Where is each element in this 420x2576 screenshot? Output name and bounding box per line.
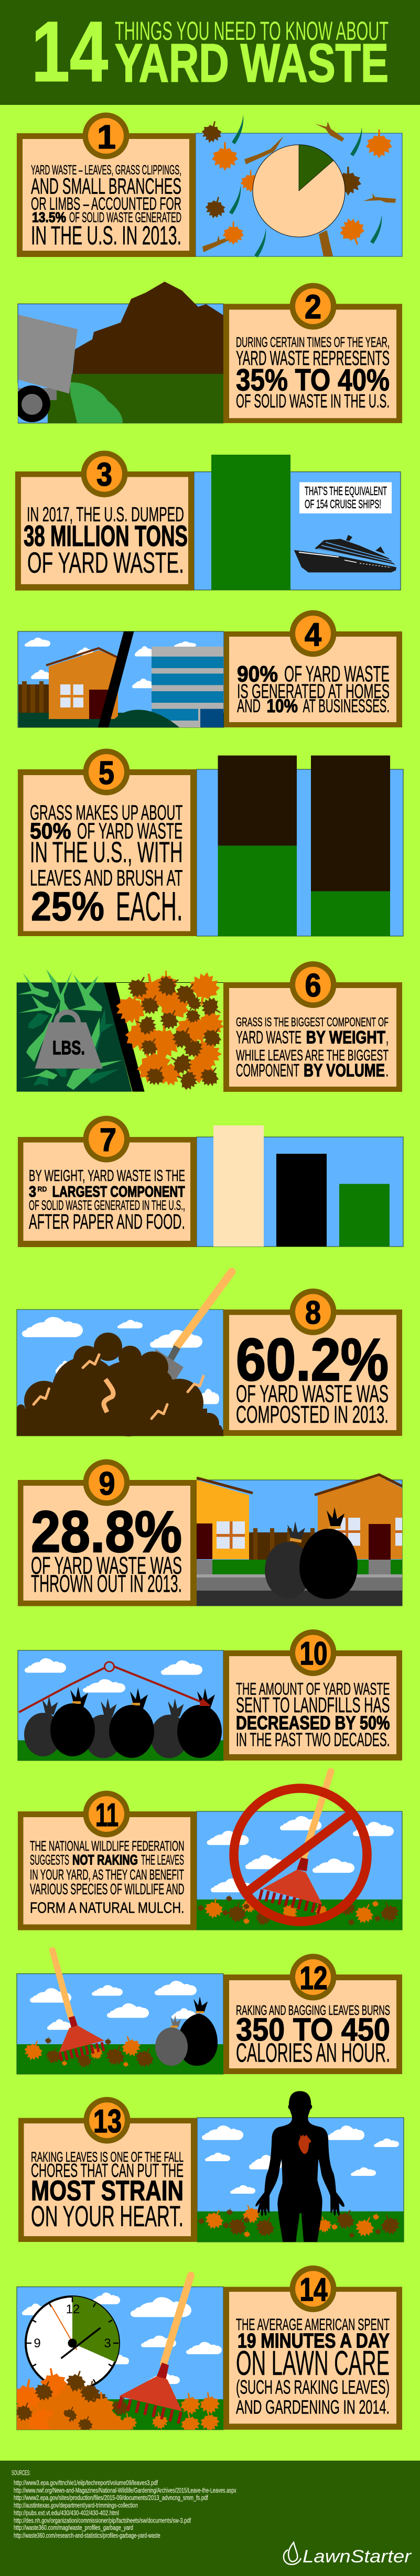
sources: http://pubs.ext.vt.edu/430/430-402/430-402.html (14, 2509, 119, 2517)
text frame (15, 471, 194, 591)
panel 7: third largest component (18, 1116, 403, 1247)
badge 11: 11 (95, 1797, 119, 1833)
panel 4: homes and businesses (18, 610, 402, 727)
illustration: bar and cruise ship (194, 455, 401, 590)
text card: OF SOLID WASTE GENERATED (69, 210, 181, 226)
text frame (18, 1480, 197, 1606)
text frame (223, 982, 402, 1092)
badge 2 (289, 283, 337, 329)
text card: 35% TO 40% (236, 363, 390, 398)
badge 5 (83, 749, 130, 795)
sources: http://www3.epa.gov/ttnchie1/eiip/techreport/volume09/leaves3.pdf (14, 2480, 158, 2487)
illustration: street with houses and trash bags (197, 1475, 402, 1606)
text frame (223, 304, 402, 423)
panel 1: what yard waste is (17, 112, 402, 257)
text card: ON YOUR HEART. (31, 2199, 184, 2232)
fallen leaves (197, 1894, 402, 1928)
illustration: dump truck and compost pile (0, 282, 223, 425)
text card: OF YARD WASTE (77, 819, 182, 844)
badge 1 (83, 112, 129, 159)
text card: OR LIMBS – ACCOUNTED FOR (31, 194, 181, 214)
panel 2: seasonal share (0, 282, 402, 425)
icon: cruise ship (294, 535, 396, 573)
heart (298, 2134, 311, 2154)
sources: http://www.nwf.org/News-and-Magazines/National-Wildlife/Gardening/Archives/2015/Leave-the-Leaves.aspx (14, 2487, 236, 2494)
badge 3: 3 (96, 457, 112, 493)
text card: RD (38, 1185, 47, 1193)
text card: OF YARD WASTE WAS (31, 1552, 182, 1579)
text card: OF SOLID WASTE GENERATED IN THE U.S., (29, 1197, 185, 1213)
panel 13: strain on heart (18, 2091, 404, 2242)
text frame (18, 769, 197, 936)
text card: GRASS MAKES UP ABOUT (30, 801, 182, 824)
text card: MOST STRAIN (31, 2175, 184, 2206)
shovel (155, 1272, 232, 1382)
text card: IN THE U.S., WITH (30, 835, 182, 868)
text frame (18, 1137, 197, 1247)
worms (34, 1355, 203, 1419)
header banner (0, 0, 420, 105)
text card: . (386, 1061, 389, 1081)
text card: BY WEIGHT (306, 1028, 385, 1048)
illustration: grass with weight and leaf pile (17, 969, 227, 1093)
text card: BY WEIGHT, YARD WASTE IS THE (29, 1166, 185, 1185)
fallen leaves (21, 2033, 158, 2071)
badge 6 (289, 961, 337, 1008)
weight label: LBS. (52, 1037, 85, 1059)
text card: 38 MILLION TONS (24, 519, 188, 552)
rake (119, 2276, 191, 2423)
trash bags (265, 1507, 358, 1599)
text card: THROWN OUT IN 2013. (31, 1570, 182, 1597)
text frame (18, 2118, 197, 2242)
illustration: human silhouette with heart (197, 2091, 404, 2242)
text card: , (386, 1028, 389, 1048)
title: 14 (31, 3, 108, 100)
text card: 13.5% (32, 210, 66, 226)
text frame (223, 1974, 402, 2074)
logo: LawnStarter (284, 2542, 412, 2567)
badge 3 (81, 450, 128, 497)
text card: SUGGESTS (30, 1852, 69, 1868)
no symbol (234, 1788, 367, 1922)
text card: THE NATIONAL WILDLIFE FEDERATION (30, 1838, 185, 1854)
weight (35, 1012, 103, 1069)
badge 1: 1 (97, 118, 116, 156)
badge 9: 9 (99, 1466, 115, 1502)
sources: http://des.nh.gov/organization/commissioner/pip/factsheets/sw/documents/sw-3.pdf (14, 2517, 191, 2525)
text frame (223, 2287, 402, 2430)
panel 3: 38 million tons (15, 450, 401, 591)
illustration: compost pile with worms and shovel (17, 1272, 232, 1436)
badge 11 (83, 1790, 130, 1838)
text card: CHORES THAT CAN PUT THE (31, 2160, 184, 2181)
badge 10: 10 (300, 1636, 327, 1672)
pie chart: 13.5 percent (253, 145, 345, 237)
badge 4: 4 (305, 617, 321, 653)
text card: IN 2017, THE U.S. DUMPED (27, 503, 184, 526)
panel 10: landfills decreased (18, 1629, 402, 1761)
trend arrow (19, 1662, 211, 1712)
text frame (224, 631, 402, 727)
text card (23, 1486, 190, 1601)
text card (23, 139, 189, 251)
panel 11: do not rake (18, 1772, 402, 1930)
office building (152, 647, 223, 727)
text card: 3 (29, 1184, 36, 1200)
badge 14: 14 (300, 2272, 328, 2308)
text card: 25% (31, 883, 104, 929)
illustration: house and office building (18, 631, 224, 727)
text card: IN YOUR YARD, AS THEY CAN BENEFIT (30, 1866, 184, 1883)
badge 14 (289, 2266, 337, 2312)
sources: http://waste360.com/mag/waste_profiles_garbage_yard (14, 2524, 133, 2531)
text card (23, 1142, 190, 1241)
footer (0, 2461, 420, 2576)
text card (23, 1817, 190, 1925)
badge 9 (83, 1459, 130, 1506)
text card: 350 TO 450 (236, 2012, 390, 2047)
sources: http://austintexas.gov/department/yard-trimmings-collection (14, 2502, 138, 2509)
chart: solid waste bars (197, 1125, 403, 1247)
text card: 19 MINUTES A DAY (238, 2330, 390, 2353)
text card: THE LEAVES (141, 1852, 184, 1868)
text card: LEAVES AND BRUSH AT (30, 865, 182, 890)
text card: EACH. (116, 883, 182, 929)
silhouette (255, 2091, 344, 2242)
text card: 10% (266, 696, 298, 716)
text card: 50% (30, 819, 71, 844)
text frame (17, 133, 196, 257)
panel 12: calories (17, 1950, 402, 2074)
rake (260, 1772, 331, 1914)
text card (229, 1980, 396, 2068)
text card (23, 775, 190, 931)
badge 10 (289, 1629, 337, 1676)
text frame (18, 1811, 197, 1930)
text card: 60.2% (236, 1327, 389, 1393)
text frame (223, 1650, 402, 1761)
house (46, 648, 118, 719)
text frame (223, 1310, 402, 1436)
text card: NOT RAKING (72, 1852, 138, 1868)
text card: AFTER PAPER AND FOOD. (29, 1210, 185, 1233)
truck wheel (0, 383, 50, 425)
text card (229, 309, 396, 418)
panel 5: grass, leaves and brush (18, 749, 403, 936)
text card (24, 2123, 191, 2236)
left house (197, 1478, 253, 1559)
callout: cruise ships (299, 482, 392, 513)
badge 12: 12 (300, 1960, 327, 1997)
text card: YARD WASTE – LEAVES, GRASS CLIPPINGS, (31, 163, 181, 178)
badge 8: 8 (305, 1295, 321, 1331)
panel 9: thrown out (18, 1459, 402, 1606)
panel 8: composted (17, 1272, 402, 1436)
sources: http://waste360.com/research-and-statistics/profiles-garbage-yard-waste (14, 2532, 160, 2539)
chart: stacked bars (197, 756, 403, 936)
badge 13 (84, 2097, 130, 2144)
badge 7 (83, 1116, 130, 1162)
illustration: trash bags with trend line (18, 1650, 223, 1761)
badge 4 (289, 610, 337, 657)
badge 6: 6 (305, 968, 321, 1004)
sources (12, 2469, 236, 2539)
badge 7: 7 (100, 1122, 116, 1158)
text card: 90% (237, 662, 278, 687)
rake (52, 1950, 104, 2061)
dark bags (24, 1696, 188, 1758)
text card: IN THE U.S. IN 2013. (31, 221, 181, 250)
clock: 9 (34, 2336, 41, 2350)
text card: COMPONENT (236, 1061, 299, 1081)
illustration: rake with no symbol (197, 1772, 402, 1930)
text card: LARGEST COMPONENT (52, 1184, 185, 1200)
text card: OF YARD WASTE. (27, 546, 184, 579)
text card: VARIOUS SPECIES OF WILDLIFE AND (30, 1881, 185, 1898)
title (31, 3, 389, 100)
panel 14: time on lawn care (8, 2266, 402, 2440)
black bags (50, 1687, 222, 1758)
text card (229, 2292, 396, 2424)
trash bags (155, 1997, 218, 2066)
badge 2: 2 (305, 288, 321, 326)
illustration: rake, leaves and bags (17, 1950, 223, 2074)
panel 6: weight versus volume (17, 961, 402, 1093)
badge 12 (289, 1954, 337, 2000)
fallen leaves (198, 2202, 403, 2240)
sources: SOURCES: (12, 2469, 30, 2476)
text card (21, 477, 188, 584)
clock: 3 (104, 2336, 111, 2350)
leaf pile (112, 970, 227, 1093)
badge 13: 13 (93, 2103, 122, 2140)
text card: AND (237, 696, 261, 716)
text card: 28.8% (31, 1499, 182, 1564)
text card: FORM A NATURAL MULCH. (30, 1899, 185, 1916)
compost pile (17, 1333, 223, 1436)
text card (229, 1656, 396, 1754)
leaf pile (17, 2368, 220, 2430)
text card (229, 1315, 396, 1430)
badge 5: 5 (99, 755, 114, 791)
text card: BY VOLUME (304, 1061, 385, 1081)
badge 8 (289, 1289, 337, 1335)
clock: 12 (66, 2302, 80, 2316)
fence (249, 1528, 318, 1560)
grass blades (17, 969, 122, 1090)
illustration: pie chart with leaves and branches (196, 115, 402, 257)
illustration: clock, leaf pile and rake (8, 2276, 223, 2440)
right house (315, 1475, 402, 1560)
text card (229, 637, 396, 722)
clock (26, 2296, 119, 2390)
text card: RAKING LEAVES IS ONE OF THE FALL (31, 2149, 184, 2165)
text card: AND SMALL BRANCHES (31, 174, 181, 199)
logo: LawnStarter: LawnStarter (303, 2547, 412, 2567)
text card: YARD WASTE (236, 1028, 301, 1048)
sources: http://www2.epa.gov/sites/production/files/2015-09/documents/2013_advncng_smm_fs.pdf (14, 2494, 208, 2502)
text card (229, 988, 396, 1087)
